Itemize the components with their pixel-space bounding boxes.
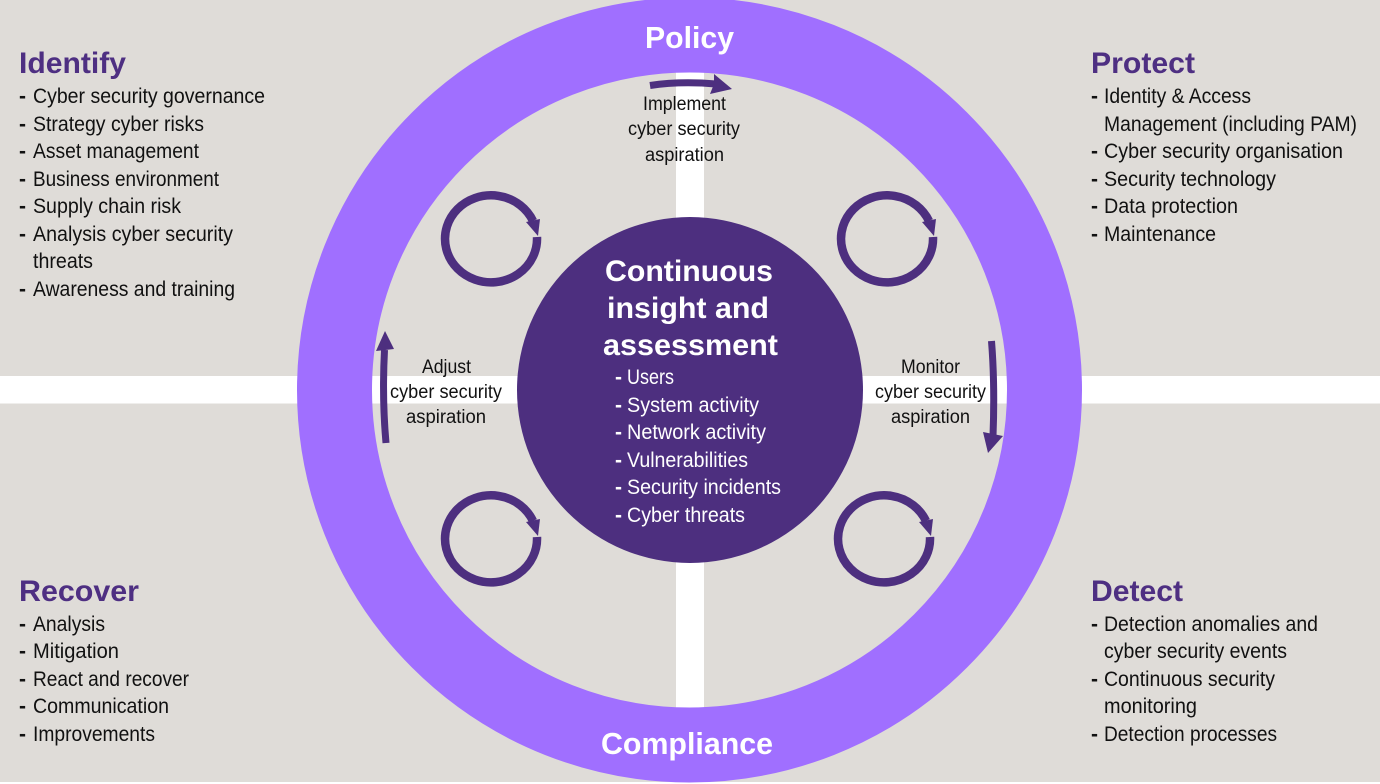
panel: Protect: Data protection (1104, 195, 1238, 218)
label: Adjust cyber security aspiration (390, 357, 502, 428)
centre text: continuous insight and assessment: Cyber threats (627, 504, 745, 527)
panel: Recover: - (19, 723, 26, 746)
panel: Detect (1091, 575, 1318, 746)
panel: Detect: monitoring (1104, 695, 1197, 718)
heading: Policy: Policy (645, 20, 735, 55)
panel: Identify: Awareness and training (33, 278, 235, 301)
icon: cycle top right (841, 195, 936, 282)
panel: Detect: - (1091, 668, 1098, 691)
panel: Detect: Detection processes (1104, 723, 1277, 746)
centre text: continuous insight and assessment: Security incidents (627, 476, 781, 499)
centre text: continuous insight and assessment: - (615, 449, 622, 472)
outer ring: policy and compliance (334, 35, 1044, 745)
icon: cycle bottom left (445, 495, 540, 582)
panel: Protect: - (1091, 195, 1098, 218)
centre text: continuous insight and assessment: assessment (603, 329, 778, 362)
panel: Identify: - (19, 223, 26, 246)
panel: Recover: React and recover (33, 668, 189, 691)
panel: Identify: Supply chain risk (33, 195, 181, 218)
panel: Identify: - (19, 140, 26, 163)
panel: Detect: - (1091, 723, 1098, 746)
panel: Recover (19, 575, 189, 746)
panel: Protect: - (1091, 140, 1098, 163)
panel: Protect: Identity & Access (1104, 85, 1251, 108)
panel: Identify: - (19, 278, 26, 301)
centre text: continuous insight and assessment: Continuous (605, 255, 773, 288)
centre text: continuous insight and assessment: - (615, 366, 622, 389)
panel: Identify: - (19, 85, 26, 108)
heading: Compliance: Compliance (601, 726, 773, 761)
centre disc (517, 217, 863, 563)
panel: Identify: threats (33, 250, 93, 273)
panel: Detect: Detection anomalies and (1104, 613, 1318, 636)
arrow: adjust (376, 331, 394, 443)
centre text: continuous insight and assessment: - (615, 421, 622, 444)
panel: Identify: Asset management (33, 140, 199, 163)
panel: Detect: cyber security events (1104, 640, 1287, 663)
arrow: monitor (983, 341, 1003, 453)
panel: Recover: Communication (33, 695, 169, 718)
panel: Recover: - (19, 613, 26, 636)
panel: Detect: Continuous security (1104, 668, 1275, 691)
arrow: implement (650, 74, 732, 94)
centre text: continuous insight and assessment: System activity (627, 394, 759, 417)
centre text: continuous insight and assessment: insight and (607, 292, 769, 325)
panel: Protect: Maintenance (1104, 223, 1216, 246)
label: Monitor cyber security aspiration (875, 357, 986, 428)
panel: Detect: Detect (1091, 575, 1183, 608)
panel: Identify: Cyber security governance (33, 85, 265, 108)
white horizontal axis band (0, 376, 1380, 404)
label: Monitor cyber security aspiration: aspiration (891, 407, 970, 428)
panel: Recover: - (19, 668, 26, 691)
panel: Detect: - (1091, 613, 1098, 636)
panel: Identify: Analysis cyber security (33, 223, 233, 246)
panel: Protect: - (1091, 223, 1098, 246)
label: Implement cyber security aspiration (628, 94, 740, 166)
centre text: continuous insight and assessment: Network activity (627, 421, 766, 444)
panel: Identify: - (19, 168, 26, 191)
panel: Protect: - (1091, 85, 1098, 108)
centre text: continuous insight and assessment: - (615, 394, 622, 417)
panel: Identify: Identify (19, 47, 126, 80)
panel: Recover: - (19, 695, 26, 718)
panel: Recover: Mitigation (33, 640, 119, 663)
label: Adjust cyber security aspiration: aspiration (406, 407, 486, 428)
icon: cycle bottom right (838, 495, 933, 582)
centre text: continuous insight and assessment: - (615, 476, 622, 499)
panel: Identify: Business environment (33, 168, 219, 191)
panel: Recover: Improvements (33, 723, 155, 746)
label: Adjust cyber security aspiration: Adjust (422, 357, 472, 378)
label: Implement cyber security aspiration: aspiration (645, 145, 724, 166)
panel: Identify: - (19, 195, 26, 218)
panel: Recover: - (19, 640, 26, 663)
panel: Protect: Management (including PAM) (1104, 113, 1357, 136)
panel: Recover: Analysis (33, 613, 105, 636)
label: Adjust cyber security aspiration: cyber security (390, 382, 502, 403)
panel: Identify (19, 47, 265, 301)
panel: Recover: Recover (19, 575, 139, 608)
icon: cycle top left (445, 195, 540, 282)
white vertical axis band (676, 40, 704, 740)
label: Implement cyber security aspiration: cyber security (628, 119, 740, 140)
panel: Identify: Strategy cyber risks (33, 113, 204, 136)
centre text: continuous insight and assessment (603, 255, 781, 527)
panel: Protect: Security technology (1104, 168, 1276, 191)
panel: Identify: - (19, 113, 26, 136)
label: Monitor cyber security aspiration: Monitor (901, 357, 961, 378)
label: Implement cyber security aspiration: Implement (643, 94, 727, 115)
panel: Protect: Cyber security organisation (1104, 140, 1343, 163)
label: Monitor cyber security aspiration: cyber security (875, 382, 986, 403)
panel: Protect (1091, 47, 1357, 246)
panel: Protect: Protect (1091, 47, 1195, 80)
panel: Protect: - (1091, 168, 1098, 191)
centre text: continuous insight and assessment: - (615, 504, 622, 527)
centre text: continuous insight and assessment: Users (627, 366, 674, 389)
centre text: continuous insight and assessment: Vulnerabilities (627, 449, 748, 472)
